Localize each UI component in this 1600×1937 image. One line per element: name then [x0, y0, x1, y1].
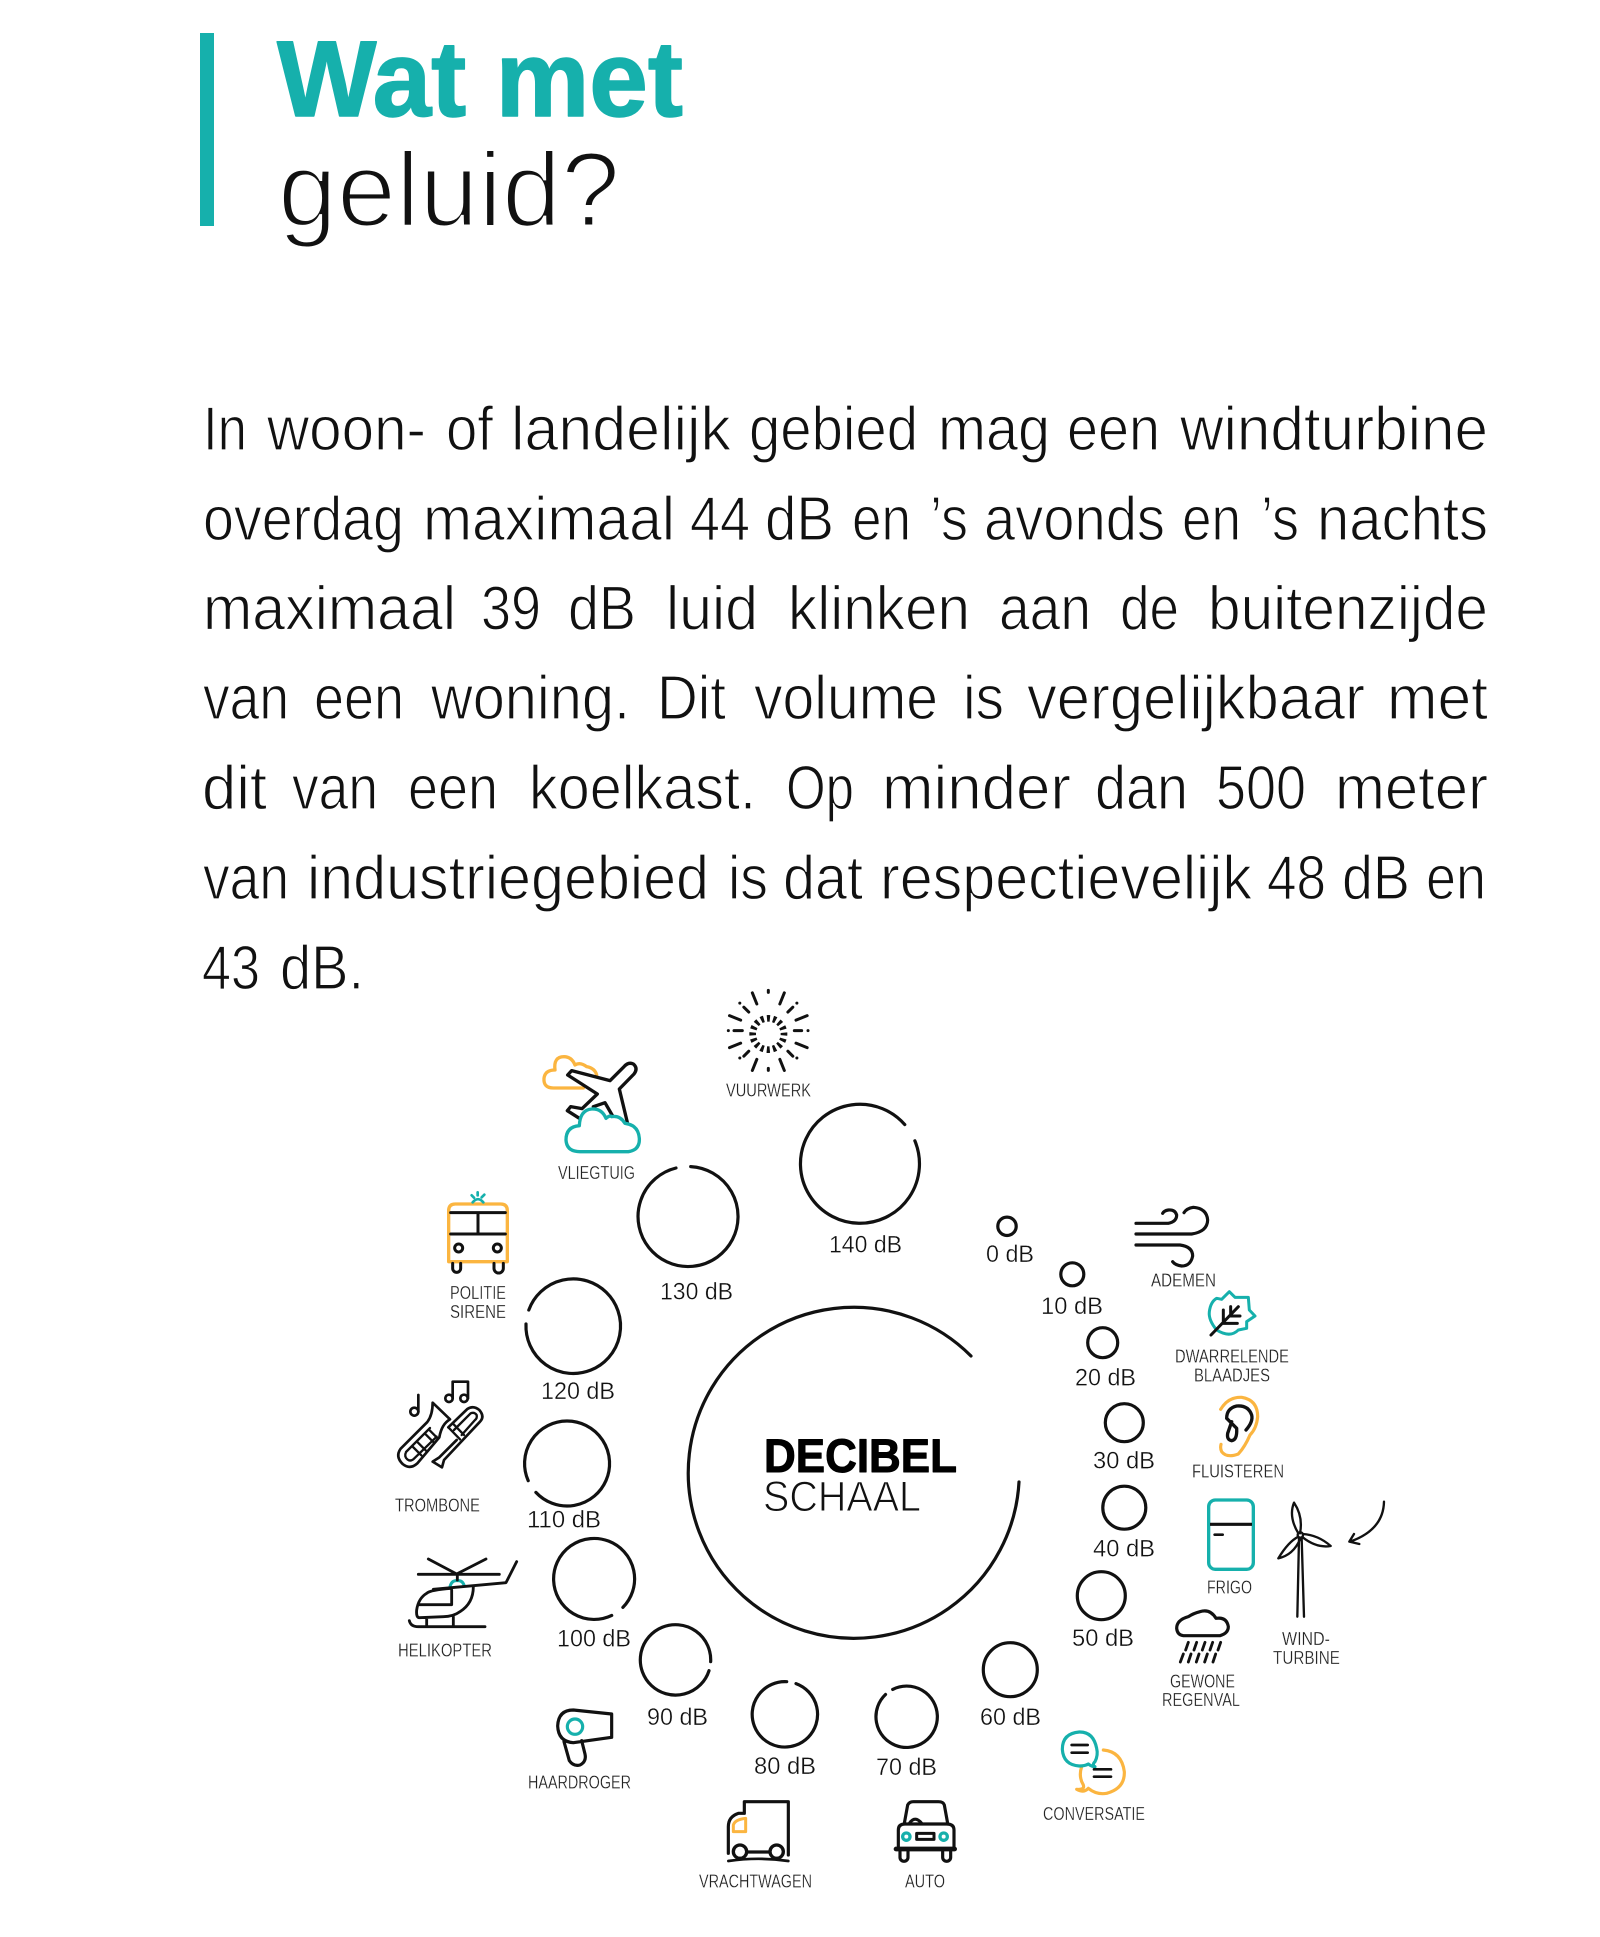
body paragraph: gebied	[749, 395, 918, 464]
body paragraph: mag	[938, 395, 1050, 464]
body paragraph: aan	[999, 574, 1091, 644]
scale step: 100 dB	[554, 1538, 635, 1652]
body paragraph: minder	[882, 754, 1071, 823]
body paragraph: woon-	[266, 395, 426, 464]
scale step: 20 dB	[1075, 1328, 1136, 1392]
central circle: decibelschaal	[688, 1307, 1019, 1638]
body paragraph: dB	[568, 574, 636, 644]
body paragraph: Op	[786, 754, 854, 823]
body paragraph: en	[1182, 485, 1241, 554]
icon: conversatie	[1043, 1732, 1145, 1824]
body paragraph: maximaal	[423, 485, 675, 554]
scale step: 100 dB: 100 dB	[557, 1626, 631, 1652]
body paragraph: overdag	[203, 485, 404, 554]
scale step: 140 dB	[800, 1104, 919, 1258]
icon: haardroger: HAARDROGER	[528, 1772, 631, 1792]
body paragraph: meter	[1335, 754, 1488, 823]
scale step: 90 dB: 90 dB	[647, 1704, 708, 1731]
body paragraph: is	[963, 664, 1004, 733]
body paragraph: ’s	[1261, 485, 1299, 554]
scale step: 50 dB	[1072, 1572, 1134, 1652]
icon: dwarrelende blaadjes: DWARRELENDE	[1175, 1347, 1289, 1367]
icon: vrachtwagen: VRACHTWAGEN	[699, 1871, 812, 1891]
icon: helikopter	[398, 1559, 517, 1661]
icon: vrachtwagen	[699, 1802, 812, 1891]
icon: vliegtuig: VLIEGTUIG	[558, 1163, 635, 1183]
icon: fluisteren: FLUISTEREN	[1192, 1462, 1284, 1482]
body paragraph: 500	[1216, 754, 1306, 823]
body paragraph: 48	[1267, 844, 1326, 913]
icon: auto: AUTO	[905, 1871, 945, 1891]
scale step: 40 dB: 40 dB	[1093, 1536, 1155, 1562]
icon: politie sirene: SIRENE	[450, 1302, 506, 1322]
icon: gewone regenval	[1162, 1611, 1240, 1710]
title	[200, 18, 683, 249]
icon: politie sirene: POLITIE	[450, 1283, 506, 1303]
body paragraph: landelijk	[511, 395, 732, 464]
icon: ademen: ADEMEN	[1151, 1271, 1216, 1291]
body paragraph: nachts	[1317, 485, 1488, 554]
scale step: 40 dB	[1093, 1486, 1155, 1562]
title accent bar	[200, 33, 214, 226]
icon: frigo: FRIGO	[1207, 1577, 1252, 1597]
scale step: 30 dB	[1093, 1404, 1155, 1474]
icon: haardroger	[528, 1710, 631, 1792]
body paragraph: industriegebied	[307, 844, 709, 913]
scale step: 110 dB	[525, 1421, 610, 1534]
body paragraph: maximaal	[203, 574, 456, 644]
icon: frigo	[1207, 1500, 1253, 1597]
body paragraph: van	[292, 754, 378, 823]
body paragraph: een	[314, 664, 404, 733]
body paragraph: woning.	[430, 664, 630, 733]
title line: geluid?: geluid?	[278, 131, 620, 249]
scale step: 30 dB: 30 dB	[1093, 1448, 1155, 1474]
scale step: 90 dB	[640, 1625, 711, 1731]
scale step: 110 dB: 110 dB	[527, 1506, 601, 1534]
icon: helikopter: HELIKOPTER	[398, 1641, 492, 1661]
body paragraph: buitenzijde	[1208, 574, 1488, 644]
icon: auto	[896, 1802, 955, 1891]
body paragraph: van	[203, 844, 289, 913]
scale step: 0 dB	[986, 1217, 1034, 1268]
scale step: 140 dB: 140 dB	[829, 1232, 902, 1258]
scale step: 20 dB: 20 dB	[1075, 1364, 1136, 1392]
icon: windturbine	[1273, 1503, 1340, 1668]
scale step: 50 dB: 50 dB	[1072, 1625, 1134, 1652]
icon: gewone regenval: GEWONE	[1170, 1671, 1235, 1691]
icon: ademen	[1136, 1207, 1216, 1291]
scale step: 10 dB: 10 dB	[1041, 1293, 1103, 1320]
scale step: 130 dB: 130 dB	[660, 1278, 733, 1306]
scale step: 70 dB	[876, 1686, 937, 1781]
body paragraph: en	[852, 485, 911, 554]
body paragraph: vergelijkbaar	[1027, 664, 1365, 733]
icon: windturbine: TURBINE	[1273, 1648, 1340, 1668]
body paragraph	[202, 395, 1488, 1003]
body paragraph: klinken	[788, 574, 970, 644]
scale step: 120 dB	[526, 1279, 621, 1405]
body paragraph: koelkast.	[529, 754, 756, 823]
central circle: decibelschaal: DECIBEL	[764, 1429, 957, 1482]
body paragraph: Dit	[657, 664, 726, 733]
scale step: 70 dB: 70 dB	[876, 1754, 937, 1781]
icon: fluisteren	[1192, 1397, 1284, 1482]
body paragraph: avonds	[984, 485, 1165, 554]
scale step: 80 dB	[752, 1682, 818, 1780]
scale step: 10 dB	[1041, 1263, 1103, 1320]
title line: Wat met: Wat met	[277, 18, 683, 139]
scale step: 60 dB: 60 dB	[980, 1704, 1041, 1731]
decibel scale diagram	[395, 990, 1384, 1891]
icon: vuurwerk: VUURWERK	[726, 1081, 811, 1101]
scale step: 60 dB	[980, 1643, 1041, 1731]
icon: trombone: TROMBONE	[395, 1496, 480, 1516]
body paragraph: de	[1120, 574, 1179, 644]
body paragraph: 43	[202, 934, 260, 1003]
body paragraph: dat	[783, 844, 863, 913]
icon: conversatie: CONVERSATIE	[1043, 1804, 1145, 1824]
body paragraph: 44	[690, 485, 750, 554]
icon: gewone regenval: REGENVAL	[1162, 1690, 1240, 1710]
scale step: 0 dB: 0 dB	[986, 1241, 1034, 1268]
icon: dwarrelende blaadjes: BLAADJES	[1194, 1366, 1270, 1386]
icon: dwarrelende blaadjes	[1175, 1292, 1289, 1386]
body paragraph: dB	[1342, 844, 1410, 913]
central circle: decibelschaal: SCHAAL	[763, 1473, 921, 1521]
body paragraph: respectievelijk	[880, 844, 1253, 913]
body paragraph: 39	[481, 574, 541, 644]
icon: politie sirene	[449, 1192, 507, 1322]
body paragraph: met	[1387, 664, 1488, 733]
icon: vuurwerk	[726, 990, 811, 1101]
body paragraph: dit	[202, 754, 267, 823]
body paragraph: windturbine	[1179, 395, 1488, 464]
scale step: 120 dB: 120 dB	[541, 1378, 615, 1405]
body paragraph: volume	[754, 664, 938, 733]
scale step: 80 dB: 80 dB	[754, 1753, 816, 1780]
body paragraph: In	[203, 395, 247, 464]
scale step: 130 dB	[638, 1167, 738, 1306]
body paragraph: of	[446, 395, 494, 464]
body paragraph: en	[1426, 844, 1486, 913]
icon: vliegtuig	[544, 1057, 639, 1183]
body paragraph: dB	[765, 485, 834, 554]
body paragraph: dB.	[280, 934, 364, 1003]
body paragraph: is	[728, 844, 768, 913]
body paragraph: luid	[666, 574, 758, 644]
icon: windturbine: WIND-	[1282, 1629, 1330, 1649]
body paragraph: ’s	[930, 485, 968, 554]
body paragraph: dan	[1095, 754, 1188, 823]
body paragraph: een	[1067, 395, 1160, 464]
body paragraph: van	[203, 664, 289, 733]
icon: trombone	[395, 1382, 482, 1516]
body paragraph: een	[408, 754, 498, 823]
arrow pointing to windturbine	[1349, 1502, 1384, 1544]
